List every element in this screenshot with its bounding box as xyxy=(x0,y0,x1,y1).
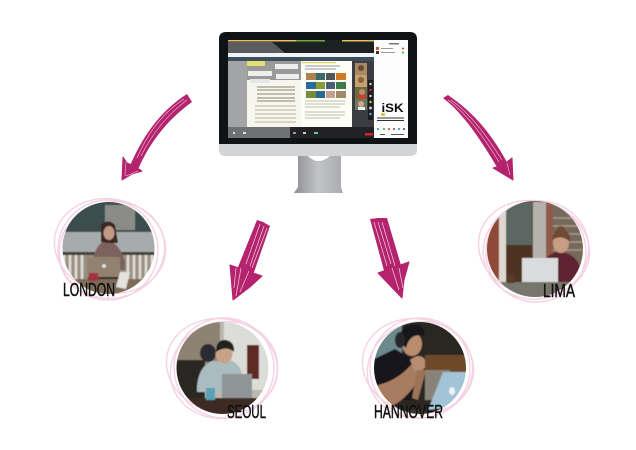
label: Hannover: HANNOVER xyxy=(374,402,443,422)
monitor bezel xyxy=(219,32,417,144)
circle photo: Lima xyxy=(478,200,590,303)
sketch rings xyxy=(468,189,600,311)
bottom control bar xyxy=(228,127,374,138)
sketch rings xyxy=(45,188,176,310)
side panel xyxy=(374,40,408,138)
video participants xyxy=(352,61,374,127)
sketch rings xyxy=(157,308,289,430)
label: Lima: LIMA xyxy=(543,281,575,301)
arrow: monitor to Seoul xyxy=(230,220,270,300)
circle photo: London xyxy=(54,198,166,301)
screen content xyxy=(228,40,408,138)
monitor chin xyxy=(219,142,417,156)
circle photo: Seoul xyxy=(166,317,278,420)
ISK logo: iSK xyxy=(382,103,404,115)
monitor xyxy=(219,32,417,193)
label: London: LONDON xyxy=(63,280,115,300)
circle photo: Hannover xyxy=(362,317,474,419)
photo xyxy=(175,320,270,418)
label: Seoul: SEOUL xyxy=(227,402,266,422)
monitor stand xyxy=(294,156,343,193)
photo xyxy=(62,202,154,294)
arrow: monitor to London xyxy=(122,94,192,180)
sketch rings xyxy=(353,308,484,430)
document right page xyxy=(301,61,352,127)
photo xyxy=(374,322,466,414)
arrow: monitor to Hannover xyxy=(370,218,409,298)
document left page xyxy=(247,61,301,127)
arrow: monitor to Lima xyxy=(443,95,513,180)
photo xyxy=(487,201,583,297)
